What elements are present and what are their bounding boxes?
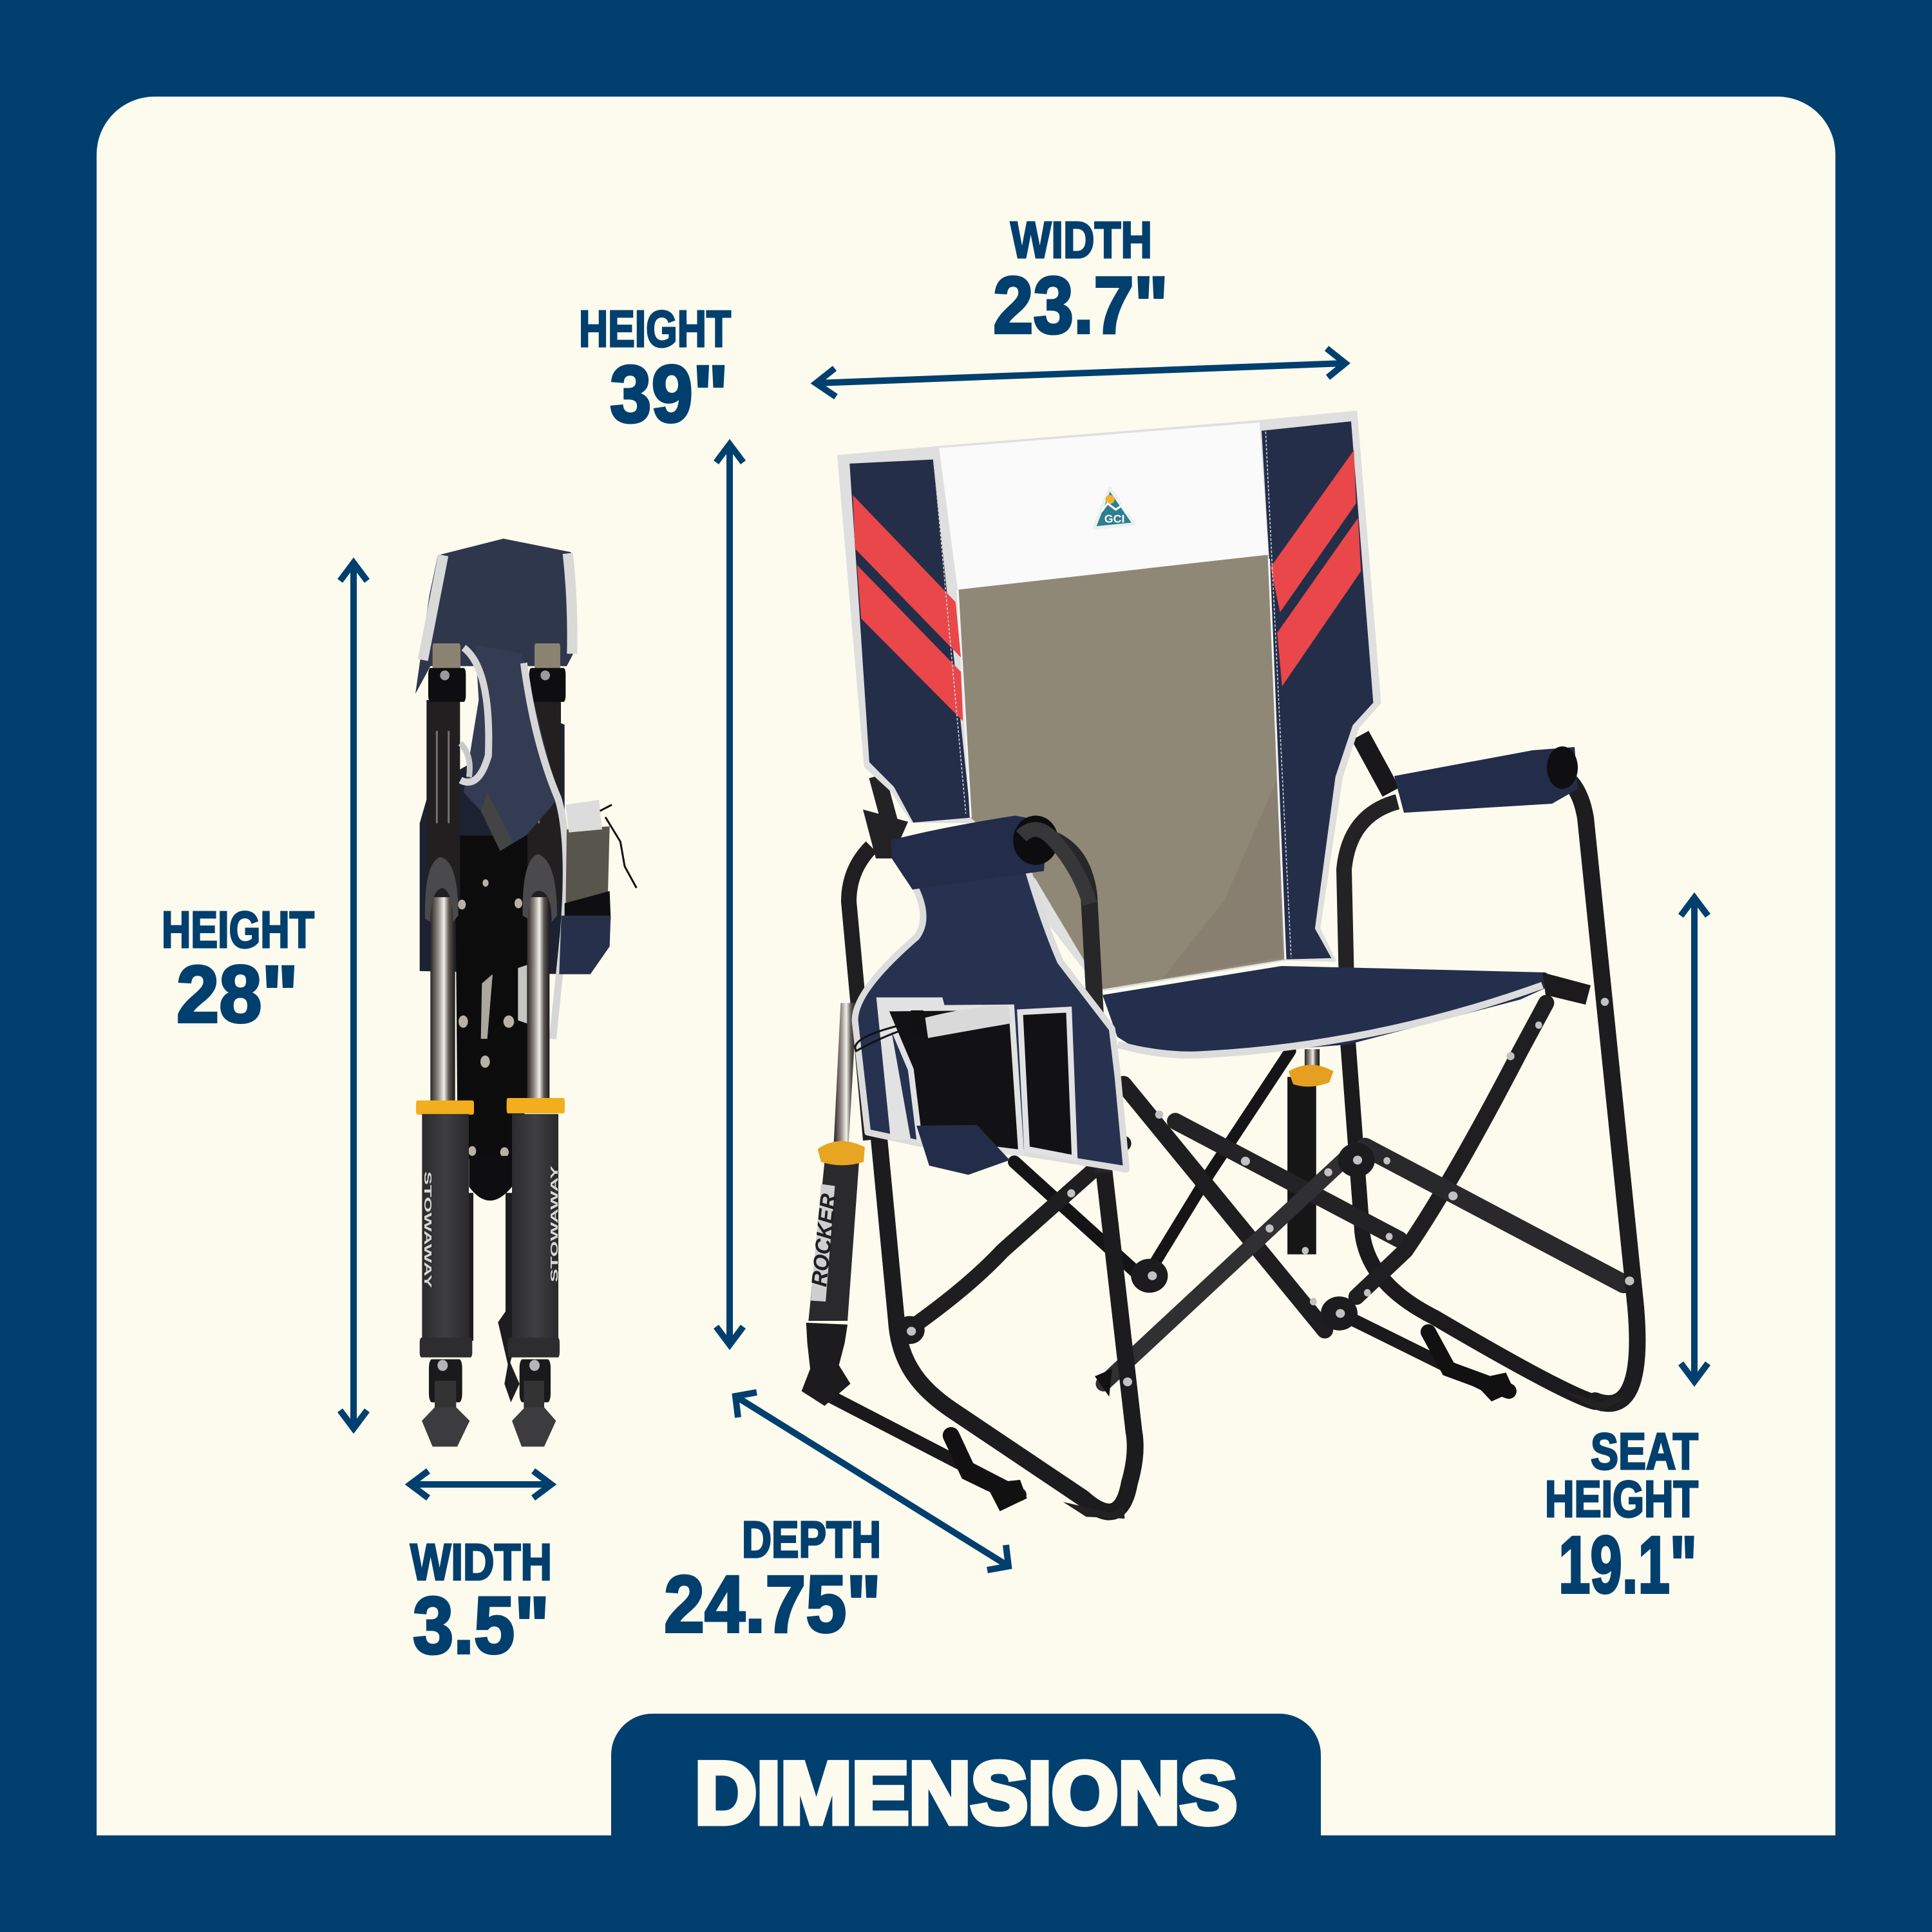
label: folded width: WIDTH [410,1533,552,1591]
rocker text: ROCKER [807,1192,841,1288]
rear left tube [849,847,871,1140]
arrow: folded height [340,563,367,1428]
title: dimensions: DIMENSIONS [695,1744,1237,1842]
second pocket [1020,1010,1075,1158]
left red chevrons [853,495,961,658]
folded centre fabric [464,645,558,851]
webbing strap [518,965,527,1023]
right arm pad [1394,746,1578,813]
mesh panel [958,554,1285,989]
left foot bar [813,1387,1020,1495]
cylinders [422,1114,469,1339]
tube clamps [425,857,459,922]
centre base [469,1156,512,1200]
dimension: open width [816,211,1345,397]
dimension: depth [664,1392,1009,1649]
logo text: GCI [1104,513,1124,526]
back support tubes [877,776,892,831]
bottle pouch [916,1125,1010,1175]
arrow: folded width [410,1471,551,1498]
white header panel [939,422,1269,590]
left trim panel [876,998,945,1140]
cylinder joint [802,1323,851,1406]
folded fabric behind frame [420,719,565,974]
folded frame body [455,835,528,1159]
arrow: open height [716,444,743,1345]
value: 19.1: 19.1" [1558,1520,1697,1610]
rocker label [811,1184,835,1302]
label: stowaway right: STOWAWAY [549,1165,560,1282]
feet [422,1359,556,1446]
rear cross bars [1014,1162,1141,1276]
value: 28: 28" [176,950,298,1039]
frame tubes [443,700,544,909]
mesh pocket [885,1007,1021,1153]
dimension: seat height [1545,898,1708,1610]
dimension: folded height [162,563,367,1428]
right navy panel [1262,421,1373,960]
seat bracket [1542,972,1591,1005]
right foot bar [1348,1317,1497,1391]
stitching [934,431,1291,957]
chrome rod [834,1003,857,1144]
rear uprights [1348,1040,1595,1402]
dimension: open height [579,300,743,1345]
rear right arm tube [1344,802,1397,1043]
white trim strip [460,648,566,1039]
label: height: HEIGHT [1545,1470,1698,1528]
label: stowaway left: STOWAWAY [422,1171,433,1289]
rear chrome rod [1305,1049,1320,1072]
yellow collar [818,1141,865,1165]
rear collar [1289,1065,1334,1086]
rear bracket [863,810,908,858]
label: width: WIDTH [1010,211,1152,269]
rivets [458,879,522,1157]
left navy panel [849,460,971,822]
arrow: seat height [1681,898,1708,1381]
value: 39: 39" [610,350,728,439]
hinges [428,643,565,702]
value: 3.5: 3.5" [413,1581,549,1671]
side pouch [559,800,636,974]
gathered top [925,1005,1012,1038]
back outer trim [838,412,1380,990]
right rocker tube [1507,770,1637,1403]
dimension: folded width [410,1471,552,1671]
pocket fabric [855,862,1126,1170]
rivets [907,1021,1542,1336]
foot tip [1063,1502,1124,1519]
lower cylinder [808,1162,859,1321]
joints [895,1143,1375,1344]
folded chair photo illustration [415,538,636,1446]
folded legs behind [468,1193,520,1403]
front rod, cylinder and left rocker [802,998,1634,1519]
frame gap [481,974,493,1039]
title tab [611,1714,1321,1842]
rocking chair photo illustration [802,412,1637,1519]
right red chevrons [1271,450,1356,612]
arrow: depth [735,1392,1009,1570]
arrow: open width [816,348,1345,397]
value: 24.75: 24.75" [664,1560,881,1649]
label: folded height: HEIGHT [162,901,314,958]
foot ends [985,1480,1027,1511]
left arm pad [891,815,1090,904]
folded seat top fabric [415,538,576,694]
mesh piping [958,559,1285,960]
front left rocker [879,1140,1135,1512]
rear cylinder [1287,1077,1316,1255]
collars [420,1338,472,1358]
seat trim [1118,985,1542,1055]
frame rear and cross bars [813,1003,1624,1495]
label: height: HEIGHT [579,300,731,357]
label: seat: SEAT [1591,1423,1698,1480]
logo badge [1094,488,1134,528]
chrome tubes [430,897,455,1104]
yellow caps [416,1101,474,1115]
chair back [838,412,1380,990]
arm pocket organiser [855,862,1126,1175]
seat [1103,966,1558,1056]
front left arm tube [1027,834,1104,1173]
cord [855,1021,916,1051]
value: 23.7: 23.7" [993,261,1168,350]
label: depth: DEPTH [742,1511,881,1568]
